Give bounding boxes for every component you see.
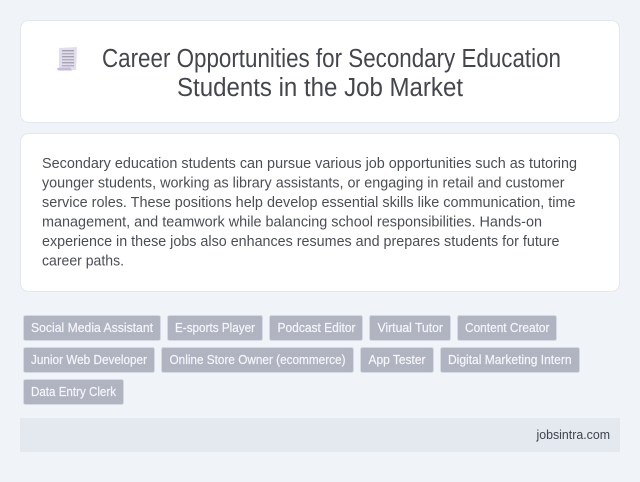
tag: Junior Web Developer — [24, 348, 154, 372]
tag: Data Entry Clerk — [24, 380, 124, 404]
tag: E-sports Player — [168, 316, 262, 340]
tag: Online Store Owner (ecommerce) — [162, 348, 354, 372]
tag: Digital Marketing Intern: Digital Marketing Intern — [448, 353, 572, 367]
footer bar — [20, 418, 620, 452]
tag: Junior Web Developer: Junior Web Developer — [31, 353, 147, 367]
footer text: source: jobsintra.com — [536, 428, 610, 442]
text block: description — [42, 155, 577, 270]
text block: description: career paths. — [42, 252, 124, 270]
tag: App Tester — [360, 348, 434, 372]
tag: Podcast Editor: Podcast Editor — [278, 321, 356, 335]
tag: E-sports Player: E-sports Player — [175, 321, 255, 335]
panel: description card — [20, 134, 620, 292]
text block: description: younger students, working as library assistants, or engaging in retail and customer — [42, 174, 564, 192]
icon: document scroll — [57, 47, 77, 70]
panel: title card — [20, 20, 620, 122]
tag: App Tester: App Tester — [368, 353, 426, 367]
text block: description: service roles. These positions help develop essential skills like communication, time — [42, 194, 576, 211]
tag: Data Entry Clerk: Data Entry Clerk — [31, 385, 117, 399]
heading: Students in the Job Market — [177, 74, 463, 102]
tag: Social Media Assistant — [24, 316, 160, 340]
heading: Career Opportunities for Secondary Education — [102, 45, 561, 73]
tag: Social Media Assistant: Social Media Assistant — [31, 321, 153, 335]
tag: Podcast Editor — [270, 316, 362, 340]
tag: Content Creator — [458, 316, 556, 340]
tag: Virtual Tutor: Virtual Tutor — [378, 321, 443, 335]
tag: Online Store Owner (ecommerce): Online Store Owner (ecommerce) — [170, 353, 346, 367]
tag: Digital Marketing Intern — [440, 348, 580, 372]
text block: description: Secondary education students can pursue various job opportunities such as tutoring — [42, 155, 577, 172]
text block: description: management, and teamwork while balancing school responsibilities. Hands-on — [42, 214, 542, 230]
tags: job titles — [24, 316, 580, 404]
tag: Content Creator: Content Creator — [465, 321, 550, 335]
tag: Virtual Tutor — [370, 316, 450, 340]
text block: description: experience in these jobs also enhances resumes and prepares students for future — [42, 233, 560, 250]
heading — [102, 45, 561, 102]
